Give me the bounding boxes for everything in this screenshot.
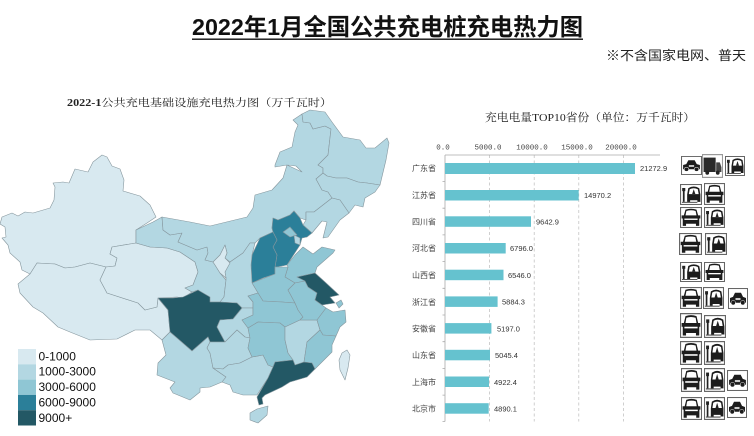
icons: Shandong	[681, 342, 724, 364]
icons: Shanxi	[681, 262, 724, 282]
province: Gansu	[136, 217, 226, 302]
province: Taiwan	[339, 350, 350, 380]
title: 2022年1月全国公共充电桩充电热力图	[192, 14, 583, 40]
province: Heilongjiang	[302, 110, 389, 185]
icons: vehicle types by province	[680, 155, 748, 419]
province: Tianjin	[294, 235, 300, 245]
x axis labels: 5000.0	[474, 144, 502, 152]
row: Jiangsu	[412, 190, 611, 200]
province: Jiangsu	[297, 273, 339, 305]
icons: Hebei	[680, 234, 726, 254]
row: Hebei	[412, 243, 533, 254]
province: Shaanxi	[220, 243, 258, 308]
row: Shandong: 山东省	[412, 350, 436, 360]
x axis labels	[436, 144, 637, 152]
row: Shandong: 5045.4	[495, 351, 518, 360]
province: Guangxi	[213, 355, 273, 395]
province: Shandong	[285, 247, 335, 283]
x axis labels: 0.0	[436, 144, 450, 152]
row: Jiangsu: 14970.2	[584, 191, 611, 200]
icons: Anhui	[681, 314, 725, 337]
province: Shanxi	[251, 232, 277, 283]
province: Inner Mongolia	[162, 114, 332, 262]
row: Shanxi: 山西省	[412, 270, 436, 280]
province: Guangdong	[257, 360, 315, 405]
province: Beijing	[283, 227, 297, 237]
province: Yunnan	[157, 332, 226, 400]
row: Zhejiang: 浙江省	[412, 297, 436, 307]
province: Jiangxi	[285, 320, 320, 365]
map heading: 2022-1 公共充电基础设施充电热力图（万千瓦时）	[67, 96, 332, 109]
row: Shanxi: 6546.0	[508, 271, 531, 280]
row: Shanghai	[412, 376, 517, 387]
row: Jiangsu: 江苏省	[412, 190, 436, 200]
icons: Beijing	[682, 398, 746, 419]
row: Shanghai: 上海市	[412, 377, 436, 387]
icons: Shanghai	[682, 369, 747, 391]
province: Xinjiang	[0, 155, 156, 274]
icons: Guangdong	[682, 155, 744, 177]
map legend	[18, 349, 96, 426]
map legend: 6000-9000	[38, 396, 96, 410]
note: excluded networks: ※不含国家电网、普天	[606, 48, 746, 63]
province: Guizhou	[207, 330, 252, 369]
row: Anhui: 安徽省	[412, 324, 436, 334]
province: Hubei	[242, 293, 303, 328]
chart heading: 充电电量TOP10省份（单位：万千瓦时）	[485, 110, 695, 124]
row: Zhejiang: 5884.3	[502, 298, 525, 306]
icons: Sichuan	[681, 208, 724, 227]
row: Anhui	[412, 323, 520, 334]
row: Sichuan: 四川省	[412, 216, 436, 226]
province: Qinghai	[100, 243, 198, 310]
province: Hebei	[272, 211, 312, 267]
row: Sichuan: 9642.9	[536, 218, 559, 226]
province: Chongqing	[217, 308, 253, 342]
province: Hainan	[250, 406, 268, 423]
choropleth map of China	[0, 110, 389, 423]
row: Beijing: 北京市	[412, 404, 436, 414]
row: Sichuan	[412, 216, 559, 227]
row: Zhejiang	[412, 296, 525, 307]
icons: Zhejiang	[681, 288, 748, 308]
province: Fujian	[304, 330, 336, 369]
province: Liaoning	[303, 198, 349, 238]
province: Anhui	[288, 281, 326, 320]
row: Hebei: 6796.0	[510, 244, 533, 253]
province: Zhejiang	[317, 308, 346, 336]
province: Tibet	[18, 263, 170, 340]
province: Henan	[252, 267, 295, 303]
row: Guangdong	[412, 163, 667, 174]
map legend: 3000-6000	[38, 380, 96, 394]
province: Sichuan	[158, 290, 242, 351]
row: Shanxi	[412, 270, 531, 280]
province: Shanghai	[336, 300, 343, 308]
row: Shanghai: 4922.4	[494, 378, 517, 387]
row: Beijing	[412, 403, 517, 414]
map legend: 0-1000	[38, 350, 76, 364]
row: Guangdong: 21272.9	[640, 164, 667, 173]
map legend: 1000-3000	[38, 364, 96, 378]
row: Beijing: 4890.1	[494, 404, 517, 414]
province: Ningxia	[213, 245, 230, 278]
row: Guangdong: 广东省	[412, 163, 436, 173]
province: Jilin	[316, 173, 380, 213]
row: Hebei: 河北省	[412, 243, 436, 253]
icons: Jiangsu	[681, 184, 724, 204]
x axis labels: 20000.0	[605, 144, 637, 152]
x axis labels: 10000.0	[516, 144, 548, 152]
province: Hunan	[248, 322, 293, 367]
bar chart: top 10 provinces	[412, 144, 667, 422]
x axis labels: 15000.0	[561, 144, 593, 152]
row: Shandong	[412, 350, 518, 360]
row: Anhui: 5197.0	[497, 324, 520, 334]
map legend: 9000+	[38, 411, 72, 425]
